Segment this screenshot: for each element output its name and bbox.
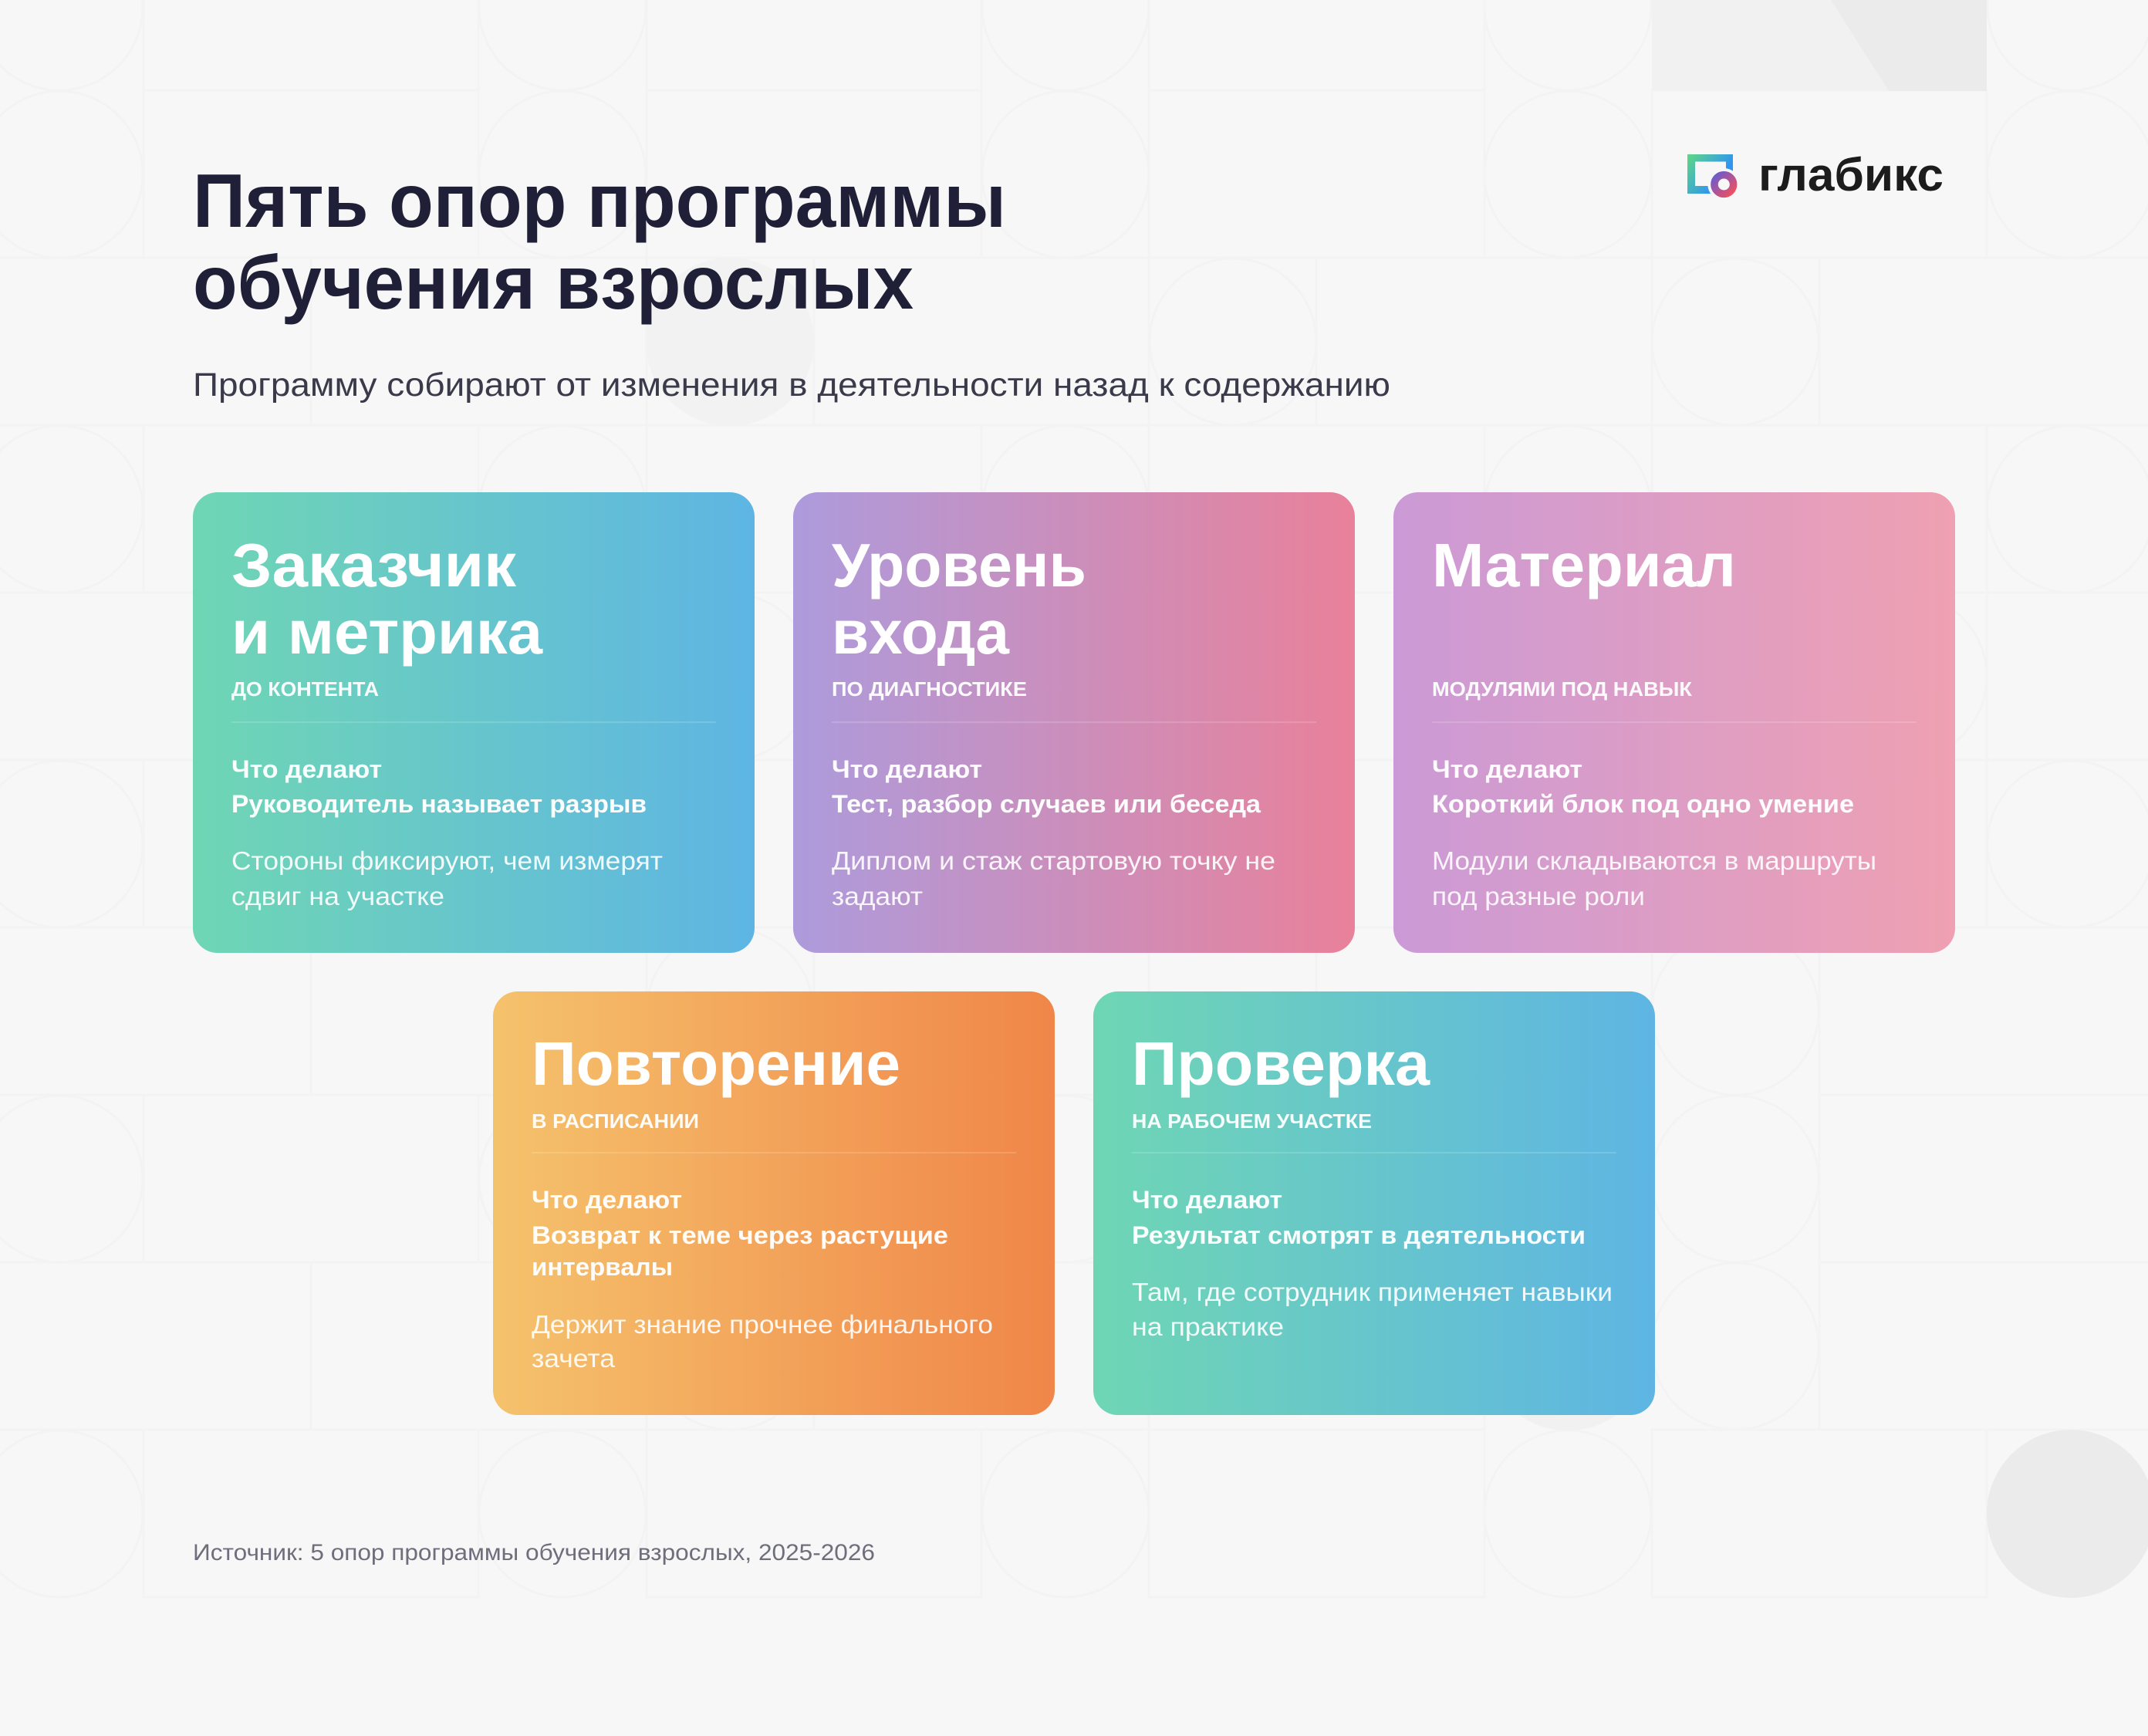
what they do (1132, 1186, 1586, 1249)
description: сдвиг на участке (231, 882, 444, 910)
what they do: Что делают (231, 755, 382, 783)
description (532, 1310, 993, 1373)
footer source: Источник: 5 опор программы обучения взрослых, 2025-2026 (193, 1540, 875, 1565)
what they do: Что делают (1132, 1186, 1282, 1214)
what they do: Что делают (532, 1186, 682, 1214)
what they do: Руководитель называет разрыв (231, 790, 647, 818)
card tag: НА РАБОЧЕМ УЧАСТКЕ (1132, 1109, 1372, 1133)
panel: проверка (1093, 991, 1655, 1415)
title: Пять опор программы (193, 158, 1006, 243)
card tag: ДО КОНТЕНТА (231, 677, 379, 701)
description (1132, 1278, 1613, 1341)
description: зачета (532, 1344, 616, 1373)
what they do: Что делают (832, 755, 982, 783)
card tag: ПО ДИАГНОСТИКЕ (832, 677, 1027, 701)
card heading (832, 531, 1086, 667)
what they do: интервалы (532, 1253, 673, 1281)
panel: материал (1393, 492, 1955, 953)
panel: уровень входа (793, 492, 1355, 953)
card heading: Заказчик (231, 531, 517, 599)
card heading: Повторение (532, 1029, 900, 1098)
what they do: Возврат к теме через растущие (532, 1221, 948, 1249)
card heading: Уровень (832, 531, 1086, 599)
title (193, 158, 1006, 325)
card heading: входа (832, 598, 1009, 667)
what they do: Что делают (1432, 755, 1582, 783)
card heading: Проверка (1132, 1029, 1430, 1098)
description (231, 846, 663, 910)
description: Стороны фиксируют, чем измерят (231, 846, 663, 875)
panel: заказчик и метрика (193, 492, 755, 953)
what they do: Короткий блок под одно умение (1432, 790, 1854, 818)
what they do: Тест, разбор случаев или беседа (832, 790, 1261, 818)
what they do: Результат смотрят в деятельности (1132, 1221, 1586, 1249)
what they do (832, 755, 1261, 818)
what they do (532, 1186, 948, 1281)
logo wordmark: глабикс (1758, 149, 1944, 201)
background filled shapes (646, 0, 2148, 1598)
title: обучения взрослых (193, 240, 914, 325)
description: Диплом и стаж стартовую точку не (832, 846, 1275, 875)
description: задают (832, 882, 923, 910)
card heading (231, 531, 543, 667)
what they do (231, 755, 647, 818)
logo (1687, 149, 1944, 201)
card tag: МОДУЛЯМИ ПОД НАВЫК (1432, 677, 1692, 701)
description: Модули складываются в маршруты (1432, 846, 1876, 875)
panel: повторение (493, 991, 1055, 1415)
description: под разные роли (1432, 882, 1645, 910)
description: Держит знание прочнее финального (532, 1310, 993, 1339)
description: на практике (1132, 1312, 1284, 1341)
card heading: и метрика (231, 598, 543, 667)
description (832, 846, 1275, 910)
card heading: Материал (1432, 531, 1736, 599)
description: Там, где сотрудник применяет навыки (1132, 1278, 1613, 1306)
subtitle: Программу собирают от изменения в деятельности назад к содержанию (193, 366, 1390, 404)
icon: logo mark (1687, 154, 1740, 201)
description (1432, 846, 1876, 910)
card tag: В РАСПИСАНИИ (532, 1109, 699, 1133)
what they do (1432, 755, 1854, 818)
